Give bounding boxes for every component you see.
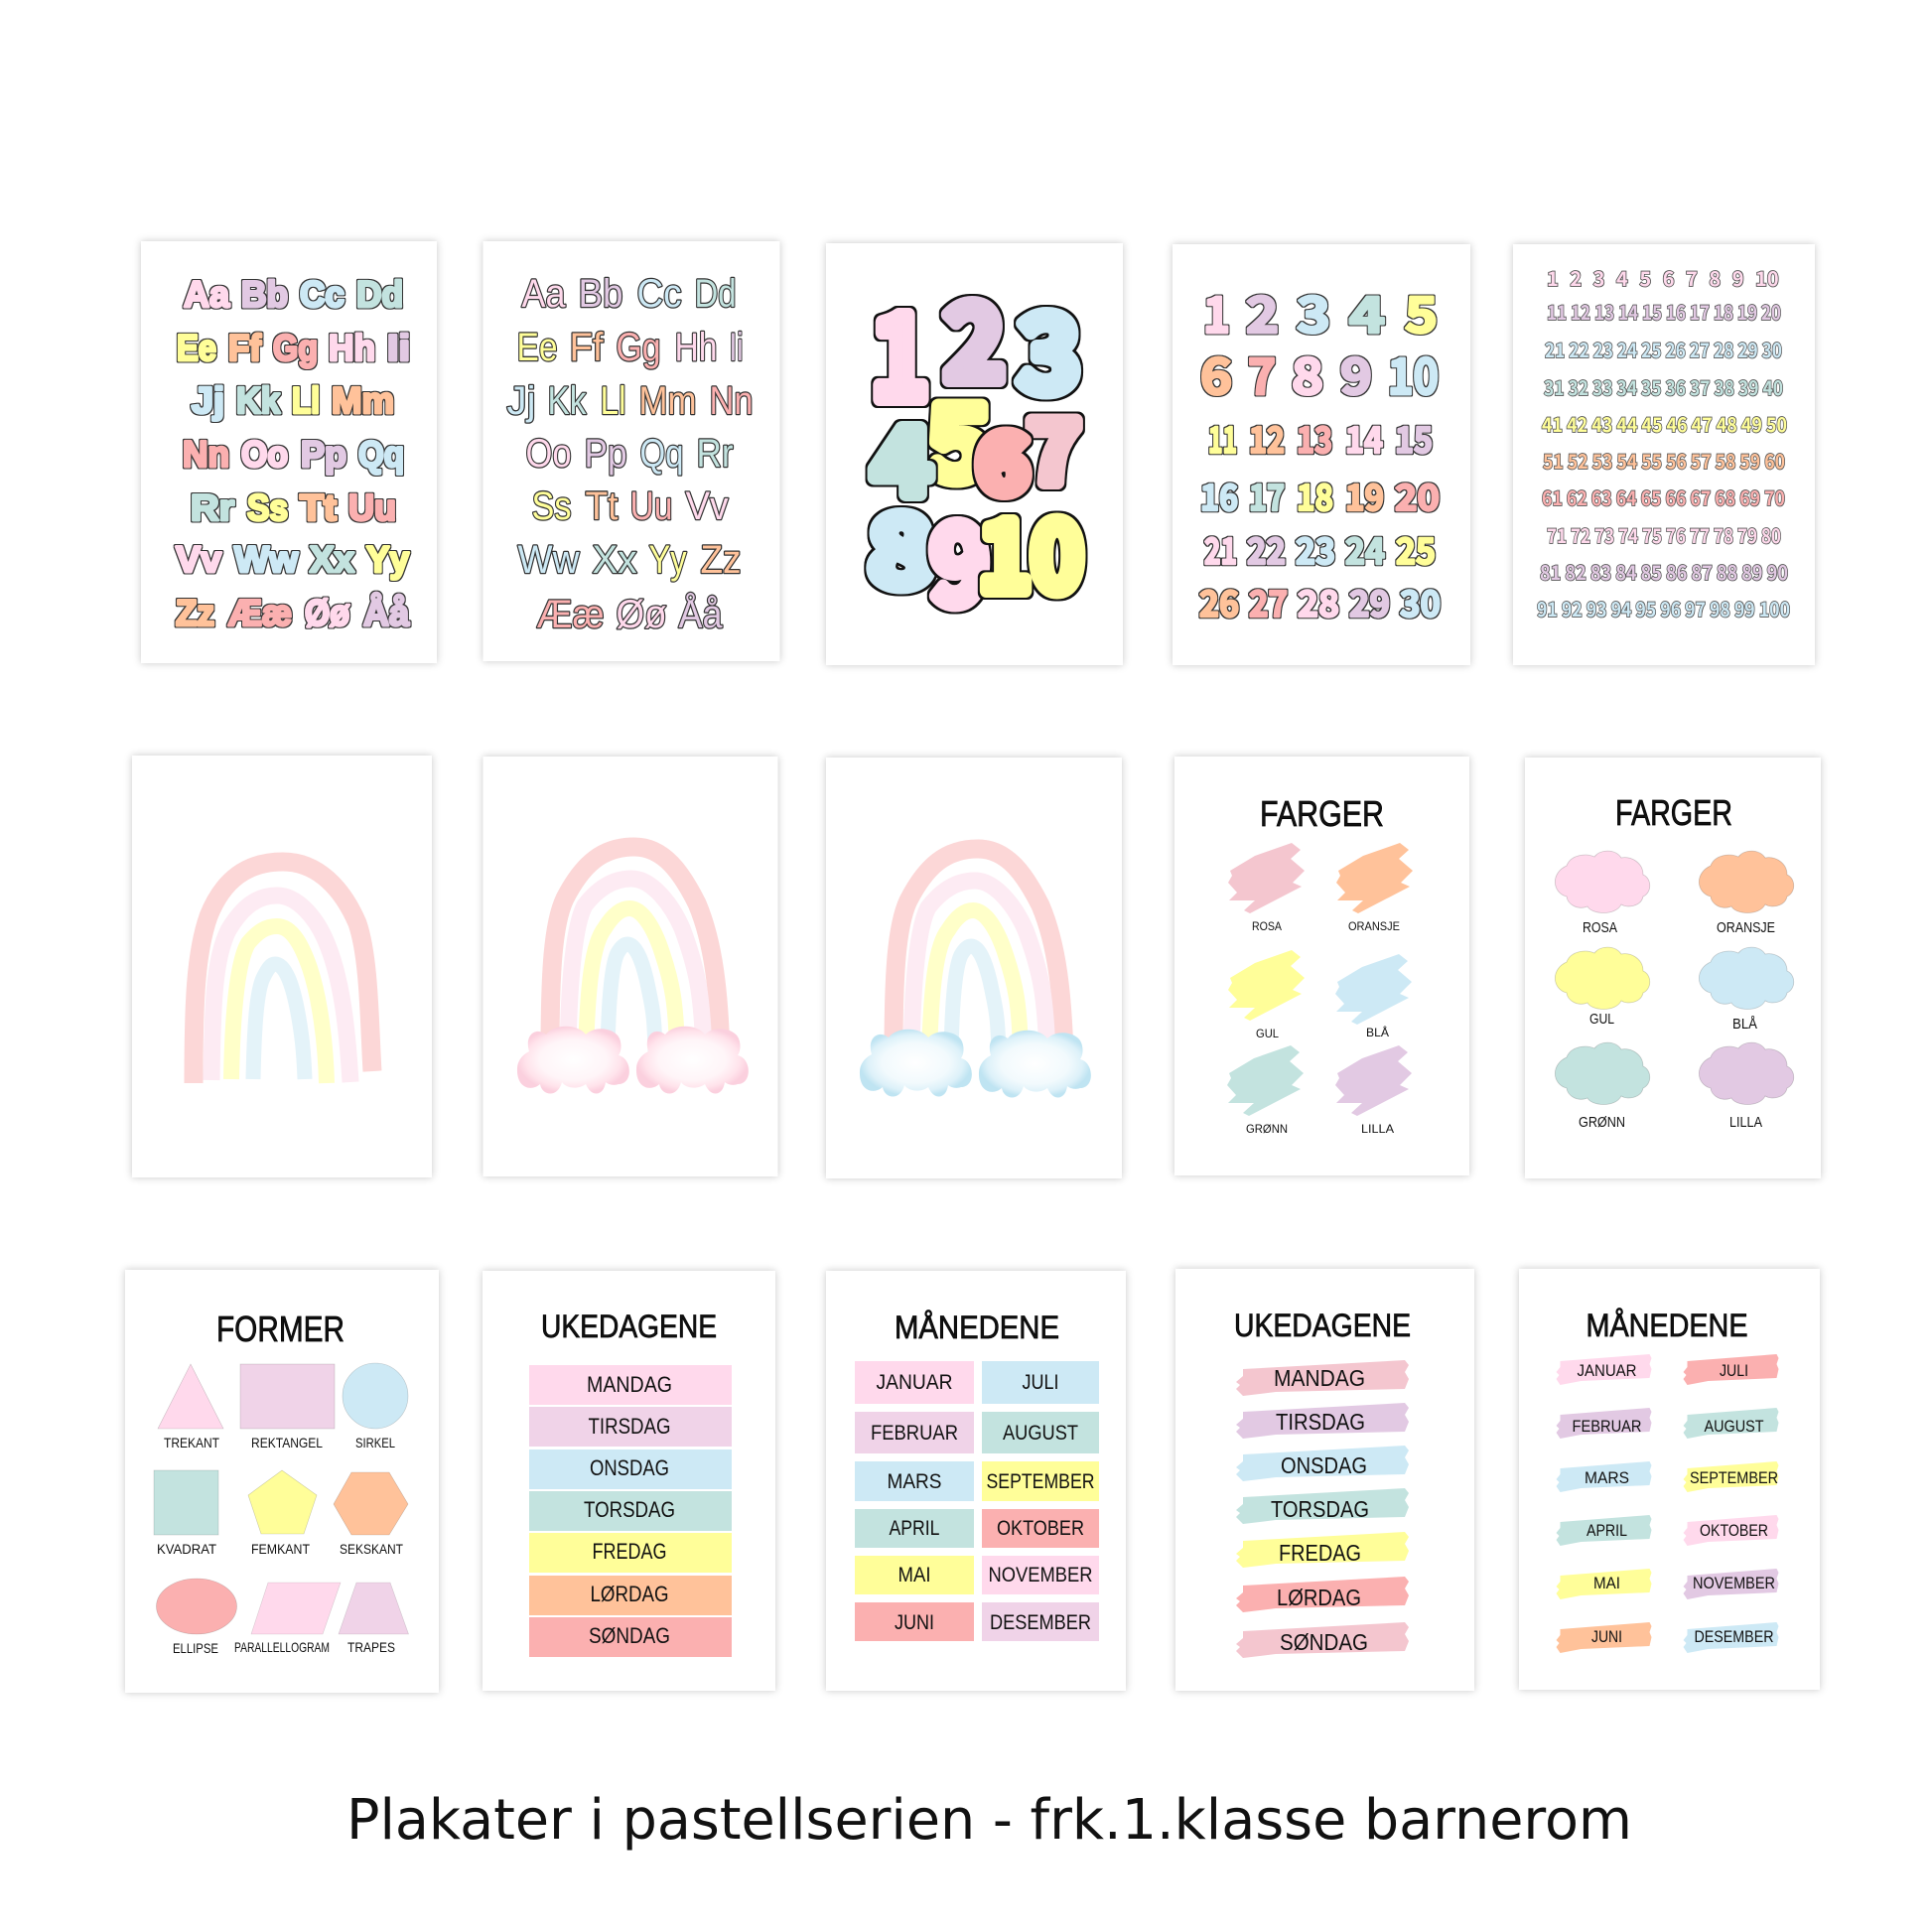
digits: 6	[977, 400, 1029, 516]
swatch: rosa	[1228, 843, 1305, 913]
month names: APRIL	[890, 1517, 939, 1540]
outlined letters: Gg	[616, 326, 661, 369]
number rows	[1537, 263, 1790, 622]
digits: 1	[871, 263, 929, 433]
bubble letters: Kk	[236, 380, 280, 421]
cloud labels: GRØNN	[1579, 1114, 1625, 1131]
poster: rainbow with blue clouds	[826, 758, 1122, 1178]
month names: JULI	[1023, 1371, 1058, 1394]
number rows: 21 22 23 24 25 26 27 28 29 30	[1545, 335, 1782, 363]
heading: FARGER	[1615, 792, 1732, 833]
bubble letters: Ll	[292, 380, 320, 421]
digits: 7	[1028, 383, 1080, 508]
poster content	[1555, 792, 1794, 1131]
number rows: 61 62 63 64 65 66 67 68 69 70	[1542, 483, 1785, 511]
bubble letters: Oo	[241, 434, 288, 475]
pentagon	[248, 1470, 317, 1534]
poster sheet	[132, 756, 432, 1177]
month names: DESEMBER	[990, 1611, 1091, 1634]
outlined letters: Nn	[709, 379, 753, 423]
month names: MAI	[1593, 1574, 1620, 1592]
small digits rows: 28	[1298, 576, 1339, 627]
number rows: 41 42 43 44 45 46 47 48 49 50	[1542, 409, 1787, 438]
small digits rows: 11	[1208, 412, 1237, 464]
poster sheet	[1525, 758, 1821, 1178]
outlined letters: Vv	[685, 484, 729, 528]
weekday names	[584, 1372, 675, 1648]
month names: SEPTEMBER	[1690, 1468, 1778, 1487]
weekday names	[1271, 1365, 1369, 1655]
poster sheet	[1519, 1269, 1820, 1690]
outlined letters: Pp	[584, 432, 627, 476]
outlined letters: Ss	[532, 484, 572, 528]
square	[154, 1470, 218, 1535]
heading: MÅNEDENE	[1587, 1308, 1747, 1343]
swatch labels: GRØNN	[1246, 1122, 1288, 1136]
pink cloud left	[517, 1027, 629, 1094]
poster content	[154, 1309, 409, 1656]
bubble letters: Ee	[177, 328, 216, 368]
month names: SEPTEMBER	[987, 1470, 1094, 1493]
triangle	[158, 1364, 223, 1429]
poster sheet	[125, 1270, 439, 1693]
bubble letters: Gg	[273, 328, 318, 368]
poster sheet	[1175, 1269, 1474, 1691]
number rows: 31 32 33 34 35 36 37 38 39 40	[1544, 372, 1783, 401]
poster: thin alphabet	[483, 241, 780, 661]
bubble letters: Ii	[387, 328, 410, 368]
swatch labels: BLÅ	[1366, 1025, 1389, 1039]
large digits rows: 3	[1297, 276, 1330, 347]
swatch: lilla	[1335, 1045, 1412, 1116]
large digits rows: 4	[1349, 276, 1385, 347]
poster sheet	[826, 758, 1122, 1178]
number rows: 91 92 93 94 95 96 97 98 99 100	[1537, 594, 1790, 622]
outlined letters: Oo	[526, 432, 572, 476]
shape labels	[157, 1435, 403, 1656]
weekday names: FREDAG	[592, 1539, 667, 1564]
small digits rows: 25	[1396, 523, 1436, 575]
outlined letters: Kk	[548, 379, 587, 423]
poster sheet	[1513, 244, 1815, 665]
shape labels: SEKSKANT	[340, 1541, 403, 1557]
rainbow	[550, 847, 721, 1052]
shape labels: PARALLELLOGRAM	[234, 1639, 330, 1655]
outlined letters: Ee	[516, 326, 558, 369]
weekday names: ONSDAG	[590, 1455, 669, 1480]
bubble letters: Ww	[234, 539, 298, 580]
large digits rows: 7	[1248, 338, 1276, 409]
bubble letters: Bb	[241, 274, 288, 315]
rainbow	[194, 862, 372, 1083]
weekday names: ONSDAG	[1281, 1452, 1367, 1478]
swatch: oransje	[1336, 843, 1413, 913]
weekday names: TIRSDAG	[588, 1414, 671, 1439]
heading: UKEDAGENE	[541, 1309, 717, 1344]
outlined letters: Åå	[679, 592, 723, 636]
outlined letters	[506, 272, 753, 636]
small digits rows: 21	[1204, 523, 1237, 575]
poster sheet	[483, 241, 780, 661]
number rows: 71 72 73 74 75 76 77 78 79 80	[1547, 520, 1781, 549]
digits: 5	[927, 361, 991, 509]
small digits rows: 19	[1345, 470, 1384, 521]
swatch labels: GUL	[1256, 1027, 1279, 1040]
poster content	[855, 1310, 1099, 1641]
poster: plain rainbow	[132, 756, 432, 1177]
number rows: 51 52 53 54 55 56 57 58 59 60	[1543, 446, 1785, 475]
swatch labels: ROSA	[1252, 919, 1282, 933]
poster: numbers 1-30	[1173, 244, 1470, 665]
poster: big numbers 1-10	[826, 243, 1123, 665]
shape labels: SIRKEL	[355, 1435, 395, 1450]
number rows: 11 12 13 14 15 16 17 18 19 20	[1547, 297, 1781, 326]
small digits rows: 17	[1249, 470, 1285, 521]
bubble letters: Aa	[184, 274, 229, 315]
cloud: rosa	[1555, 851, 1650, 913]
outlined letters: Ll	[600, 379, 625, 423]
large digits rows: 2	[1246, 276, 1279, 347]
ellipse	[157, 1579, 236, 1634]
swatch labels	[1246, 919, 1400, 1136]
bubble letters: Mm	[332, 380, 394, 421]
weekday names: LØRDAG	[1277, 1585, 1361, 1610]
brush strokes	[1236, 1360, 1409, 1658]
poster: weekdays with bars	[483, 1271, 775, 1691]
weekday names: LØRDAG	[590, 1582, 669, 1606]
bubble letters: Pp	[301, 434, 346, 475]
month names: NOVEMBER	[1693, 1574, 1775, 1592]
poster sheet	[1173, 244, 1470, 665]
month names: AUGUST	[1704, 1417, 1763, 1436]
small digits rows	[1199, 412, 1441, 627]
poster: months with boxes	[826, 1271, 1126, 1691]
month names: MARS	[888, 1470, 941, 1493]
weekday names: MANDAG	[587, 1372, 672, 1397]
bubble letters: Uu	[348, 487, 396, 528]
poster: shapes	[125, 1270, 439, 1693]
small digits rows: 20	[1395, 470, 1440, 521]
rainbow	[894, 849, 1064, 1054]
outlined letters: Xx	[592, 538, 637, 582]
outlined letters: Mm	[639, 379, 697, 423]
bubble letters: Øø	[305, 593, 349, 633]
month names: FEBRUAR	[1573, 1417, 1642, 1436]
weekday names: TIRSDAG	[1276, 1409, 1365, 1435]
digits: 10	[979, 479, 1083, 619]
bubble letters: Hh	[329, 328, 375, 368]
cloud labels: ROSA	[1583, 919, 1617, 936]
shape labels: TRAPES	[347, 1639, 395, 1655]
outlined letters: Uu	[629, 484, 673, 528]
cloud: blå	[1699, 947, 1794, 1009]
weekday names: TORSDAG	[1271, 1496, 1369, 1522]
bubble letters: Ss	[247, 487, 288, 528]
poster content	[1557, 1308, 1779, 1653]
outlined letters: Qq	[639, 432, 683, 476]
pink cloud right	[636, 1027, 749, 1094]
poster content	[1234, 1308, 1411, 1658]
cloud: grønn	[1555, 1042, 1650, 1104]
small digits rows: 13	[1297, 412, 1332, 464]
digits	[869, 258, 1083, 635]
small digits rows: 18	[1297, 470, 1333, 521]
outlined letters: Zz	[701, 538, 741, 582]
outlined letters: Tt	[586, 484, 618, 528]
digits: 4	[873, 387, 931, 521]
heading: FORMER	[216, 1309, 345, 1349]
outlined letters: Bb	[578, 272, 623, 316]
large digits rows: 5	[1405, 276, 1438, 347]
outlined letters: Yy	[649, 538, 687, 582]
outlined letters: Cc	[637, 272, 681, 316]
large digits rows: 9	[1340, 338, 1372, 409]
bubble letters: Dd	[356, 274, 403, 315]
month names: JULI	[1720, 1361, 1748, 1380]
small digits rows: 27	[1249, 576, 1288, 627]
shape labels: TREKANT	[164, 1435, 219, 1450]
month names: JANUAR	[876, 1371, 953, 1394]
shape labels: FEMKANT	[251, 1541, 310, 1557]
swatch: grønn	[1227, 1045, 1304, 1116]
number rows: 81 82 83 84 85 86 87 88 89 90	[1540, 557, 1788, 586]
month names: MARS	[1585, 1468, 1629, 1487]
poster sheet	[483, 1271, 775, 1691]
outlined letters: Dd	[695, 272, 737, 316]
poster: numbers 1-100	[1513, 244, 1815, 665]
poster: rainbow with pink clouds	[483, 757, 778, 1176]
outlined letters: Ææ	[536, 593, 604, 636]
cloud labels: ORANSJE	[1717, 919, 1775, 936]
shape labels: KVADRAT	[157, 1541, 216, 1557]
bubble letters: Zz	[176, 593, 214, 633]
poster content	[529, 1309, 732, 1657]
digits: 3	[1018, 269, 1080, 422]
month names: FEBRUAR	[871, 1422, 958, 1445]
swatch labels: LILLA	[1361, 1122, 1394, 1136]
outlined letters: Øø	[616, 593, 667, 636]
digits: 9	[930, 477, 989, 635]
bubble letters: Ææ	[228, 593, 292, 633]
swatch: gul	[1228, 950, 1305, 1021]
bubble letters: Åå	[363, 593, 409, 633]
small digits rows: 24	[1345, 523, 1385, 575]
month names: OKTOBER	[1700, 1521, 1768, 1540]
footer title: Plakater i pastellserien - frk.1.klasse barnerom	[346, 1788, 1632, 1853]
rectangle	[240, 1364, 335, 1429]
large digits rows	[1200, 276, 1439, 409]
poster sheet	[826, 1271, 1126, 1691]
heading: UKEDAGENE	[1234, 1308, 1411, 1343]
small digits rows: 30	[1400, 576, 1441, 627]
outlined letters: Ii	[729, 326, 743, 369]
month names: JANUAR	[1577, 1361, 1636, 1380]
digits: 2	[944, 258, 1005, 411]
outlined letters: Jj	[506, 379, 536, 423]
small digits rows: 23	[1296, 523, 1335, 575]
hexagon	[334, 1472, 408, 1535]
month names: OKTOBER	[997, 1517, 1084, 1540]
heading: MÅNEDENE	[895, 1310, 1059, 1345]
cloud labels: BLÅ	[1732, 1016, 1757, 1033]
outlined letters: Aa	[522, 272, 566, 316]
shape labels: REKTANGEL	[251, 1435, 323, 1450]
cloud: oransje	[1699, 851, 1794, 913]
weekday names: FREDAG	[1279, 1540, 1361, 1566]
bubble letters: Rr	[191, 487, 234, 528]
month boxes	[855, 1361, 1099, 1641]
month names: JUNI	[1591, 1627, 1622, 1646]
month names	[1573, 1361, 1778, 1646]
weekday names: SØNDAG	[1280, 1629, 1368, 1655]
large digits rows: 6	[1200, 338, 1232, 409]
small digits rows: 14	[1345, 412, 1383, 464]
blue cloud right	[979, 1031, 1091, 1098]
poster: months with brush strokes	[1519, 1269, 1820, 1690]
blue cloud left	[860, 1030, 972, 1097]
small digits rows: 26	[1199, 576, 1239, 627]
trapezoid	[339, 1583, 409, 1634]
bubble letters: Xx	[310, 539, 354, 580]
poster: colours with brush swatches	[1174, 757, 1469, 1175]
bubble letters: Cc	[300, 274, 345, 315]
cloud labels: GUL	[1589, 1011, 1614, 1028]
digits: 8	[869, 474, 933, 615]
large digits rows: 10	[1388, 338, 1439, 409]
outlined letters: Hh	[675, 326, 717, 369]
bubble letters: Tt	[300, 487, 337, 528]
bubble letters: Yy	[366, 539, 409, 580]
month names: NOVEMBER	[989, 1564, 1092, 1587]
shape labels: ELLIPSE	[173, 1640, 218, 1656]
poster: weekdays with brush strokes	[1175, 1269, 1474, 1691]
poster sheet	[1174, 757, 1469, 1175]
circle	[343, 1363, 408, 1429]
month names: APRIL	[1587, 1521, 1627, 1540]
poster: colours with clouds	[1525, 758, 1821, 1178]
month names: DESEMBER	[1694, 1627, 1773, 1646]
bubble letters: Nn	[183, 434, 229, 475]
bubble letters: Qq	[358, 434, 404, 475]
small digits rows: 22	[1247, 523, 1286, 575]
colour bars	[529, 1365, 732, 1657]
small digits rows: 15	[1395, 412, 1433, 464]
outlined letters: Ww	[518, 538, 580, 582]
swatch: blå	[1335, 954, 1412, 1025]
outlined letters: Rr	[697, 432, 733, 476]
swatch labels: ORANSJE	[1348, 919, 1400, 933]
large digits rows: 8	[1292, 338, 1323, 409]
bubble letters: Jj	[192, 380, 224, 421]
small digits rows: 29	[1349, 576, 1390, 627]
poster: bold alphabet	[141, 241, 437, 663]
poster sheet	[141, 241, 437, 663]
month names: MAI	[897, 1564, 931, 1587]
small digits rows: 12	[1249, 412, 1285, 464]
heading: FARGER	[1260, 793, 1384, 834]
month names: JUNI	[895, 1611, 934, 1634]
number rows: 1 2 3 4 5 6 7 8 9 10	[1547, 263, 1779, 292]
outlined letters: Ff	[570, 326, 604, 369]
cloud: lilla	[1699, 1042, 1794, 1104]
weekday names: MANDAG	[1274, 1365, 1365, 1391]
cloud labels: LILLA	[1729, 1114, 1762, 1131]
bubble letters: Vv	[176, 539, 221, 580]
poster sheet	[483, 757, 778, 1176]
poster sheet	[826, 243, 1123, 665]
cloud labels	[1579, 919, 1775, 1131]
bubble letters	[176, 274, 410, 633]
parallelogram	[251, 1583, 341, 1634]
weekday names: SØNDAG	[589, 1623, 670, 1648]
month names	[871, 1371, 1094, 1634]
brush tags	[1557, 1354, 1779, 1653]
month names: AUGUST	[1003, 1422, 1078, 1445]
small digits rows: 16	[1200, 470, 1238, 521]
large digits rows: 1	[1203, 276, 1230, 347]
weekday names: TORSDAG	[584, 1497, 675, 1522]
bubble letters: Ff	[228, 328, 262, 368]
cloud: gul	[1555, 947, 1650, 1009]
